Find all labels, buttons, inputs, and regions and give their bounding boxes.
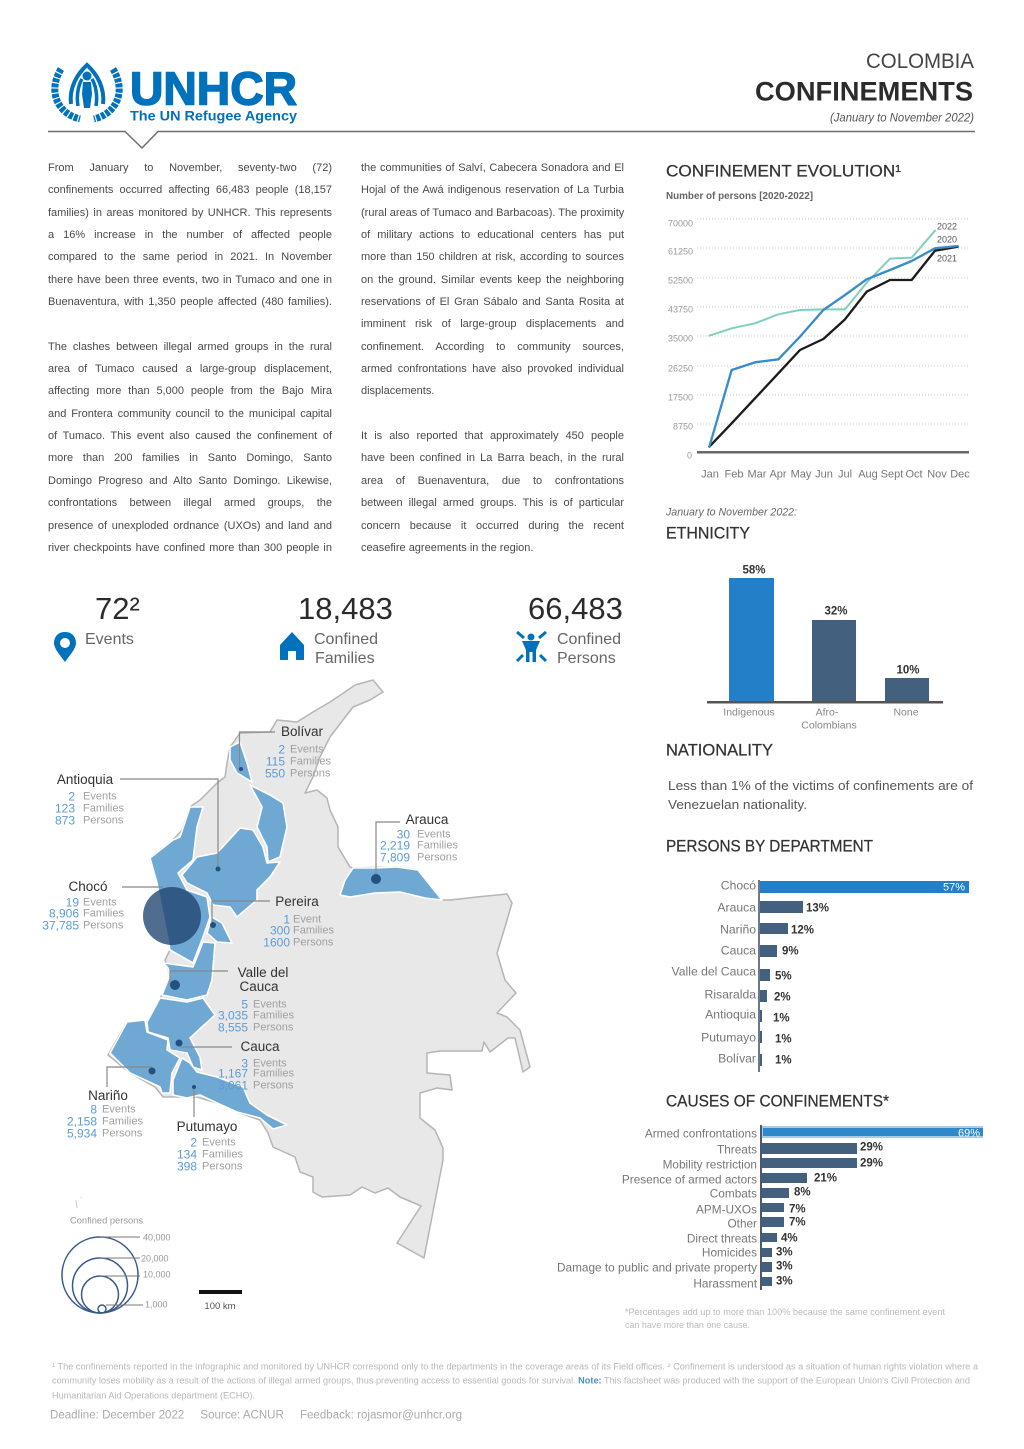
- bar chart: causes of confinements: 7%: [789, 1204, 806, 1216]
- label: Cauca: 1,167: [218, 1066, 248, 1080]
- text column 2: concern because it occurred during the recent: [361, 520, 624, 532]
- location dots: [148, 767, 381, 1089]
- text column 2: more than 150 children at risk, according to sources: [361, 251, 624, 263]
- label: Nariño: Persons: [102, 1128, 143, 1140]
- logo wordmark: UNHCR: [130, 62, 297, 114]
- label: Putumayo: [177, 1119, 243, 1174]
- bar chart: persons by department: 9%: [782, 946, 799, 958]
- bar chart: causes of confinements: 29%: [860, 1142, 883, 1154]
- stat: events: [54, 591, 140, 662]
- label: Chocó: 19: [66, 896, 79, 910]
- label: Cauca: Events: [253, 1058, 287, 1070]
- nationality statement: [668, 778, 973, 812]
- heading: persons by department: PERSONS BY DEPARTMENT: [666, 838, 873, 856]
- label: Arauca: Events: [417, 828, 451, 840]
- line chart: confinement evolution: [668, 218, 970, 480]
- y axis labels: 26250: [668, 364, 693, 374]
- text column 1: affecting more than 5,000 people from the Bajo Mira: [48, 385, 332, 397]
- y axis labels: 35000: [668, 334, 693, 344]
- label: Cauca: 3: [241, 1056, 248, 1070]
- label: Nariño: Nariño: [88, 1088, 128, 1103]
- bar chart: causes of confinements: APM-UXOs: [696, 1202, 757, 1216]
- label: Chocó: Chocó: [68, 879, 108, 894]
- label: Putumayo: 398: [177, 1160, 197, 1174]
- text column 1: Domingo Progreso and Alto Santo Domingo. Likewise,: [48, 475, 332, 487]
- bar chart: ethnicity: None: [893, 706, 919, 718]
- map of Colombia: [42, 680, 530, 1258]
- bar chart: causes of confinements: Mobility restriction: [663, 1158, 757, 1172]
- footer notes: ¹ The confinements reported in the infographic and monitored by UNHCR correspond only to the departments in the coverage areas of its Field offices. ² Confinement is understood as a situation of human rights violation where a: [52, 1362, 978, 1372]
- series: 2021: [709, 247, 958, 447]
- title block: [755, 50, 974, 124]
- text column 1: river checkpoints have confined more than 300 people in: [48, 542, 332, 554]
- text column 2: [361, 162, 624, 554]
- series labels: [937, 222, 957, 264]
- label: Arauca: 30: [397, 828, 410, 842]
- series labels: 2022: [937, 222, 957, 232]
- bar chart: ethnicity: [707, 564, 943, 732]
- y axis labels: 70000: [668, 218, 693, 228]
- nationality statement: Less than 1% of the victims of confinements are of: [668, 778, 973, 793]
- scale bar: [199, 1290, 242, 1312]
- y axis labels: 8750: [673, 422, 693, 432]
- y axis labels: 17500: [668, 392, 693, 402]
- map legend: confined persons: 40,000: [143, 1232, 171, 1242]
- country outline: [108, 680, 530, 1258]
- text column 1: [48, 162, 332, 554]
- heading: ethnicity: ETHNICITY: [666, 524, 750, 542]
- text column 2: between illegal armed groups. This is of particular: [361, 497, 624, 509]
- date range: (January to November 2022): [830, 112, 974, 124]
- label: Bolívar: 550: [265, 766, 285, 780]
- department: Valle del Cauca: [162, 942, 215, 1000]
- month labels: Apr: [769, 468, 787, 480]
- text column 1: of Tumaco. This event also caused the confinement of: [48, 430, 332, 442]
- department: Arauca: [340, 867, 442, 900]
- bar chart: causes of confinements: 3%: [776, 1260, 793, 1272]
- department: Risaralda: [207, 917, 232, 943]
- footer notes: community loses mobility as a result of the actions of illegal armed groups, thus preventing access to essential goods for survival. Note: This factsheet was produced with the support of the European Union's Civil Protection and: [52, 1376, 970, 1386]
- stat: events: Events: [85, 631, 134, 648]
- bar chart: persons by department: Bolívar: [718, 1052, 756, 1066]
- label: Bolívar: 115: [266, 754, 285, 768]
- department: Antioquia east: [250, 785, 287, 862]
- stat: confined families: 18,483: [298, 591, 393, 626]
- text column 2: It is also reported that approximately 450 people: [361, 430, 624, 442]
- bar chart: persons by department: 13%: [806, 902, 829, 914]
- label: Pereira: 1: [283, 912, 290, 926]
- series: 2022: [709, 231, 935, 336]
- text column 1: Buenaventura, with 1,350 people affected (480 families).: [48, 296, 332, 308]
- logo tagline: The UN Refugee Agency: [130, 108, 297, 124]
- month labels: Feb: [725, 468, 743, 480]
- bar chart: causes of confinements: 3%: [776, 1246, 793, 1258]
- bar chart: causes of confinements: Harassment: [693, 1276, 758, 1290]
- icon: map pin: [54, 632, 76, 662]
- label: Valle del Cauca: 8,555: [218, 1020, 248, 1034]
- label: Arauca: Arauca: [406, 812, 449, 827]
- label: Arauca: Persons: [417, 852, 458, 864]
- text column 1: confinements occurred affecting 66,483 people (18,157: [48, 184, 332, 196]
- label: Antioquia: 2: [68, 790, 75, 804]
- proportional circles: [62, 1237, 143, 1313]
- bar chart: persons by department: Arauca: [717, 900, 756, 914]
- bar chart: persons by department: 12%: [791, 924, 814, 936]
- bar chart: persons by department: [672, 878, 969, 1072]
- label: Bolívar: Events: [290, 744, 324, 756]
- bar chart: persons by department: Cauca: [721, 944, 756, 958]
- label: Pereira: Event: [293, 914, 321, 926]
- bar chart: causes of confinements: 8%: [794, 1186, 811, 1198]
- text column 2: on the ground. Similar events keep the neighboring: [361, 274, 624, 286]
- month labels: [701, 468, 970, 480]
- bar chart: causes of confinements: Armed confrontations: [645, 1126, 757, 1140]
- label: Chocó: [42, 879, 124, 932]
- label: Chocó: 37,785: [42, 918, 79, 932]
- label: Chocó: Persons: [83, 920, 124, 932]
- main title: CONFINEMENTS: [755, 76, 973, 106]
- icon: UNHCR emblem: [55, 65, 119, 119]
- causes footnote: can have more than one cause.: [625, 1320, 750, 1331]
- label: Putumayo: Families: [202, 1148, 243, 1160]
- month labels: Mar: [748, 468, 767, 480]
- month labels: Sept: [881, 468, 903, 480]
- bar chart: ethnicity: Indigenous: [723, 706, 775, 718]
- bar chart: persons by department: 2%: [774, 992, 791, 1004]
- bar chart: causes of confinements: 21%: [814, 1172, 837, 1184]
- bar chart: causes of confinements: Presence of armed actors: [622, 1172, 757, 1186]
- label: Chocó: Families: [83, 908, 124, 920]
- label: Putumayo: Persons: [202, 1160, 243, 1172]
- map legend: confined persons: 20,000: [141, 1254, 169, 1264]
- label: Cauca: [218, 1039, 294, 1092]
- text column 2: have been confined in La Barra beach, in the rural: [361, 452, 624, 464]
- month labels: Jul: [838, 468, 852, 480]
- causes footnote: *Percentages add up to more than 100% because the same confinement event: [625, 1307, 945, 1318]
- stat: confined persons: [517, 591, 623, 667]
- bar chart: persons by department: Nariño: [720, 922, 756, 936]
- label: Cauca: Families: [253, 1068, 294, 1080]
- logo: UNHCR: [55, 62, 297, 124]
- label: Nariño: 2,158: [67, 1114, 97, 1128]
- bar chart: persons by department: Putumayo: [701, 1030, 756, 1044]
- bar chart: causes of confinements: Damage to public and private property: [557, 1260, 757, 1274]
- text column 2: imminent risk of large-group displacements and: [361, 318, 624, 330]
- month labels: Nov: [927, 468, 947, 480]
- bar chart: persons by department: Valle del Cauca: [672, 964, 756, 978]
- bar chart: causes of confinements: [557, 1125, 983, 1290]
- label: Valle del Cauca: Families: [253, 1010, 294, 1022]
- map legend: confined persons: [62, 1197, 171, 1313]
- bubble: Chocó: [143, 887, 201, 945]
- leader lines: [107, 732, 400, 1117]
- label: Pereira: Pereira: [275, 894, 319, 909]
- text column 2: of military actions to educational centers has put: [361, 229, 624, 241]
- bar chart: persons by department: 1%: [775, 1034, 792, 1046]
- bar chart: causes of confinements: Homicides: [702, 1246, 757, 1260]
- label: Arauca: [380, 812, 458, 864]
- bar chart: persons by department: Antioquia: [705, 1008, 756, 1022]
- chart subtitle: Number of persons [2020-2022]: [666, 191, 813, 202]
- bar chart: ethnicity: 58%: [742, 564, 766, 576]
- label: Bolívar: 2: [278, 742, 285, 756]
- text column 2: displacements.: [361, 385, 434, 397]
- label: Bolívar: Bolívar: [281, 724, 324, 739]
- stat: confined families: [280, 591, 393, 667]
- text column 1: presence of unexploded ordnance (UXOs) and land and: [48, 520, 332, 532]
- label: Nariño: Events: [102, 1104, 136, 1116]
- text column 1: there have been three events, two in Tumaco and one in: [48, 274, 332, 286]
- label: Nariño: 8: [90, 1102, 97, 1116]
- label: Antioquia: Antioquia: [57, 772, 114, 787]
- month labels: Oct: [905, 468, 923, 480]
- label: Nariño: Families: [102, 1116, 143, 1128]
- footer notes: [52, 1362, 978, 1400]
- y axis labels: 52500: [668, 276, 693, 286]
- bar chart: persons by department: Chocó: [721, 878, 756, 892]
- department: Nariño: [110, 1020, 180, 1093]
- label: Bolívar: [265, 724, 331, 780]
- label: Cauca: Cauca: [240, 1039, 280, 1054]
- label: Valle del Cauca: 3,035: [218, 1008, 248, 1022]
- y axis labels: 43750: [668, 304, 693, 314]
- nationality statement: Venezuelan nationality.: [668, 797, 807, 812]
- month labels: Jun: [815, 468, 833, 480]
- label: Nariño: [67, 1088, 143, 1140]
- stat: confined families: Confined: [314, 631, 378, 648]
- icon: confined person: [517, 632, 546, 662]
- map legend: confined persons: 1,000: [145, 1300, 168, 1310]
- label: Valle del Cauca: Cauca: [239, 979, 279, 994]
- department: Putumayo: [173, 1058, 287, 1129]
- label: Cauca: 3,061: [218, 1078, 248, 1092]
- bar chart: causes of confinements: 4%: [781, 1232, 798, 1244]
- label: Valle del Cauca: Persons: [253, 1022, 294, 1034]
- text column 1: more than 200 families in Santo Domingo, Santo: [48, 452, 332, 464]
- bar chart: causes of confinements: Combats: [710, 1186, 757, 1200]
- label: Valle del Cauca: 5: [241, 998, 248, 1012]
- bar chart: persons by department: 1%: [775, 1054, 792, 1066]
- label: Antioquia: Events: [83, 790, 117, 802]
- text column 1: families) in areas monitored by UNHCR. This represents: [48, 207, 332, 219]
- label: Valle del Cauca: [218, 965, 294, 1034]
- text column 1: a 16% increase in the number of affected people: [48, 229, 332, 241]
- label: Valle del Cauca: Events: [253, 998, 287, 1010]
- bar chart: persons by department: 5%: [775, 970, 792, 982]
- bar chart: causes of confinements: 3%: [776, 1276, 793, 1288]
- key figures: [54, 591, 623, 667]
- text column 2: armed confrontations have also provoked individual: [361, 363, 624, 375]
- text column 1: confrontations between illegal armed groups, the: [48, 497, 332, 509]
- y axis labels: 0: [687, 450, 692, 460]
- stat: confined persons: Persons: [557, 650, 616, 667]
- bar chart: ethnicity: Afro-: [816, 706, 839, 718]
- country name: COLOMBIA: [866, 50, 974, 73]
- label: Bolívar: Families: [290, 756, 331, 768]
- bar chart: causes of confinements: 7%: [789, 1216, 806, 1228]
- department: Antioquia: [182, 828, 280, 917]
- label: Chocó: 8,906: [49, 906, 79, 920]
- bar chart: persons by department: 1%: [773, 1012, 790, 1024]
- label: Pereira: 1600: [263, 936, 290, 950]
- month labels: Jan: [701, 468, 719, 480]
- scale bar: 100 km: [204, 1301, 236, 1312]
- label: Antioquia: 123: [55, 802, 75, 816]
- footer notes: Humanitarian Aid Operations department (ECHO).: [52, 1390, 255, 1400]
- text column 2: the communities of Salví, Cabecera Sonadora and El: [361, 162, 624, 174]
- y axis labels: 61250: [668, 246, 693, 256]
- label: Antioquia: [55, 772, 124, 828]
- bar chart: ethnicity: Colombians: [801, 720, 857, 732]
- label: Putumayo: Events: [202, 1136, 236, 1148]
- series labels: 2021: [937, 254, 957, 264]
- text column 2: Hojal of the Awá indigenous reservation of La Turbia: [361, 184, 624, 196]
- header rule with notch: [48, 132, 975, 148]
- text column 1: The clashes between illegal armed groups in the rural: [48, 341, 332, 353]
- bar chart: causes of confinements: 69%: [958, 1128, 980, 1140]
- label: Putumayo: Putumayo: [177, 1119, 237, 1134]
- bar chart: causes of confinements: Other: [727, 1216, 757, 1230]
- series labels: 2020: [937, 234, 957, 244]
- label: Nariño: 5,934: [67, 1126, 97, 1140]
- label: Cauca: Persons: [253, 1080, 294, 1092]
- label: Pereira: [263, 894, 334, 950]
- stat: events: 72²: [95, 591, 140, 626]
- period note: January to November 2022:: [665, 506, 797, 518]
- label: Arauca: 2,219: [380, 838, 410, 852]
- month labels: Dec: [950, 468, 970, 480]
- label: Arauca: Families: [417, 840, 458, 852]
- series: 2020: [709, 246, 958, 447]
- label: Valle del Cauca: Valle del: [238, 965, 288, 980]
- map legend: confined persons: Confined persons: [70, 1216, 144, 1226]
- bar chart: persons by department: 57%: [943, 882, 965, 894]
- label: Putumayo: 134: [177, 1148, 197, 1162]
- text column 2: reservations of El Gran Sábalo and Santa Rosita at: [361, 296, 624, 308]
- stat: confined persons: 66,483: [528, 591, 623, 626]
- bar chart: causes of confinements: Direct threats: [687, 1232, 757, 1246]
- bar chart: persons by department: Risaralda: [705, 988, 756, 1002]
- label: Arauca: 7,809: [380, 850, 410, 864]
- label: Antioquia: 873: [55, 814, 75, 828]
- bar chart: ethnicity: 10%: [896, 664, 920, 676]
- department: Bolívar: [230, 742, 252, 782]
- department: Chocó: [150, 807, 210, 963]
- month labels: Aug: [858, 468, 878, 480]
- label: Pereira: Families: [293, 924, 334, 936]
- heading: confinement evolution: CONFINEMENT EVOLUTION¹: [666, 162, 902, 180]
- text column 2: confinement. According to community sources,: [361, 341, 624, 353]
- label: Pereira: 300: [270, 924, 290, 938]
- label: Antioquia: Persons: [83, 814, 124, 826]
- bar chart: ethnicity: 32%: [824, 606, 848, 618]
- label: Antioquia: Families: [83, 802, 124, 814]
- heading: nationality: NATIONALITY: [666, 742, 773, 760]
- icon: house: [280, 632, 304, 660]
- month labels: May: [791, 468, 812, 480]
- text column 1: area of Tumaco caused a large-group displacement,: [48, 363, 332, 375]
- text column 2: ceasefire agreements in the region.: [361, 542, 533, 554]
- text column 1: From January to November, seventy-two (72): [48, 162, 332, 174]
- label: Chocó: Events: [83, 896, 117, 908]
- text column 2: area of Buenaventura, due to confrontations: [361, 475, 624, 487]
- stat: confined families: Families: [315, 650, 375, 667]
- label: Pereira: Persons: [293, 936, 334, 948]
- y axis labels: [668, 218, 693, 460]
- bar chart: causes of confinements: Threats: [717, 1142, 757, 1156]
- heading: causes of confinements: CAUSES OF CONFINEMENTS*: [666, 1092, 890, 1110]
- text column 2: (rural areas of Tumaco and Barbacoas). The proximity: [361, 207, 624, 219]
- stat: confined persons: Confined: [557, 631, 621, 648]
- bar chart: causes of confinements: 29%: [860, 1158, 883, 1170]
- department: Cauca: [147, 998, 215, 1070]
- text column 1: compared to the same period in 2021. In November: [48, 251, 332, 263]
- text column 1: and Frontera community council to the municipal capital: [48, 408, 332, 420]
- footer credits: Deadline: December 2022 Source: ACNUR Feedback: rojasmor@unhcr.org: [50, 1410, 462, 1422]
- causes footnote: [625, 1307, 945, 1331]
- label: Putumayo: 2: [190, 1136, 197, 1150]
- map legend: confined persons: 10,000: [143, 1270, 171, 1280]
- label: Bolívar: Persons: [290, 768, 331, 780]
